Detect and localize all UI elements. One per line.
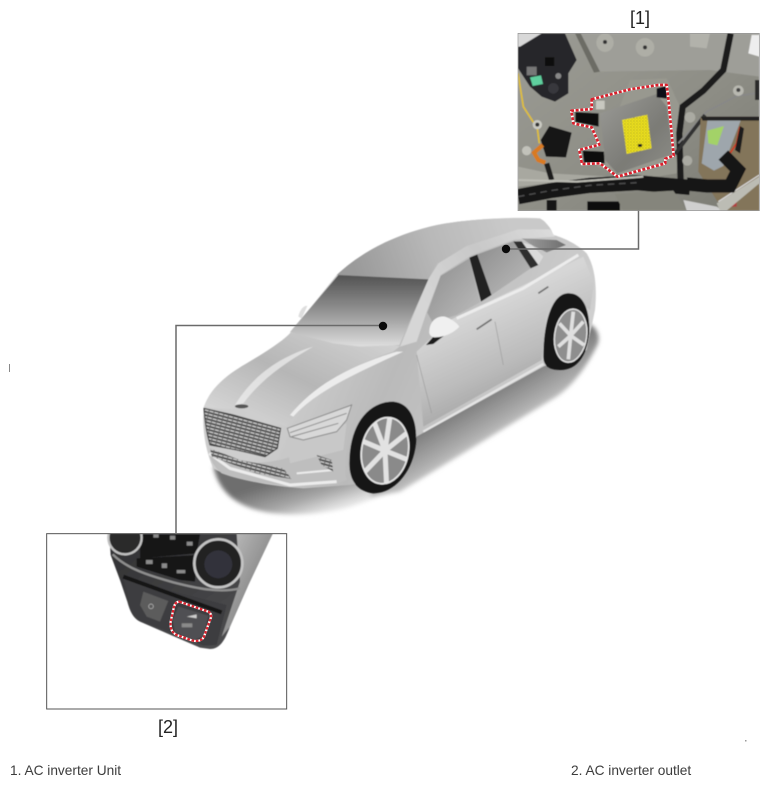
door shut lines (417, 322, 503, 413)
stray mark right (745, 740, 746, 742)
lower grille (210, 448, 292, 479)
marker dot: rear window (502, 245, 510, 253)
far mirror (298, 306, 307, 318)
grey cable (677, 137, 684, 144)
car body (203, 218, 596, 488)
inverter module body (575, 86, 673, 173)
front wheel (349, 402, 416, 493)
top control buttons (137, 534, 200, 582)
yellow wire (518, 73, 539, 143)
rear wheel (543, 293, 590, 370)
panel 2 border (47, 534, 287, 709)
hood highlights (235, 347, 313, 405)
black connector (541, 126, 572, 157)
leader line: car to photo 1 (506, 208, 638, 249)
stray mark left (9, 364, 10, 372)
legend item: AC inverter Unit: 1. AC inverter Unit (10, 763, 121, 778)
roof rail and A-pillar (400, 229, 555, 347)
front door window (427, 258, 480, 323)
rear door window (477, 241, 531, 295)
left button (140, 592, 168, 622)
console body (109, 534, 273, 649)
orange wire (534, 145, 545, 163)
outlet button (173, 607, 208, 640)
rear quarter dark strip (513, 241, 538, 268)
marker dot: windshield (379, 322, 387, 330)
photo border (518, 33, 759, 211)
B pillar (469, 254, 492, 302)
caption: [2]: [2] (158, 717, 178, 737)
fog vent (317, 455, 333, 472)
belt line highlight (457, 255, 578, 318)
panel: AC inverter unit photo (518, 33, 759, 211)
hood (204, 333, 400, 427)
ground shadow (213, 323, 599, 514)
spoiler (522, 238, 566, 252)
red dashed outline: AC inverter outlet (171, 602, 211, 641)
side door area (417, 257, 594, 427)
vertical wiring harness (679, 33, 731, 182)
dark bracket top-left (518, 33, 577, 102)
door handles (477, 319, 492, 329)
legend item: AC inverter outlet: 2. AC inverter outlet (571, 763, 691, 778)
side sill highlight (423, 364, 543, 432)
front bumper (209, 420, 349, 486)
silver sweep trim (113, 554, 240, 590)
right vent (194, 539, 242, 587)
leader line: car to panel 2 (176, 326, 382, 533)
panel: AC inverter outlet console (47, 521, 287, 709)
main harness along bottom (518, 177, 759, 211)
bonnet badge (235, 404, 248, 408)
windshield (290, 275, 428, 347)
wing mirror (426, 316, 459, 345)
bumper lip highlight (209, 453, 337, 485)
recess and side module (698, 117, 759, 211)
red dashed outline: AC inverter unit (571, 85, 674, 177)
headlight (287, 405, 352, 440)
lower panel (196, 604, 226, 646)
caption: [1]: [1] (630, 8, 650, 28)
roof (337, 218, 549, 279)
car illustration (203, 218, 599, 514)
left vent (106, 534, 144, 556)
grille (204, 408, 281, 457)
